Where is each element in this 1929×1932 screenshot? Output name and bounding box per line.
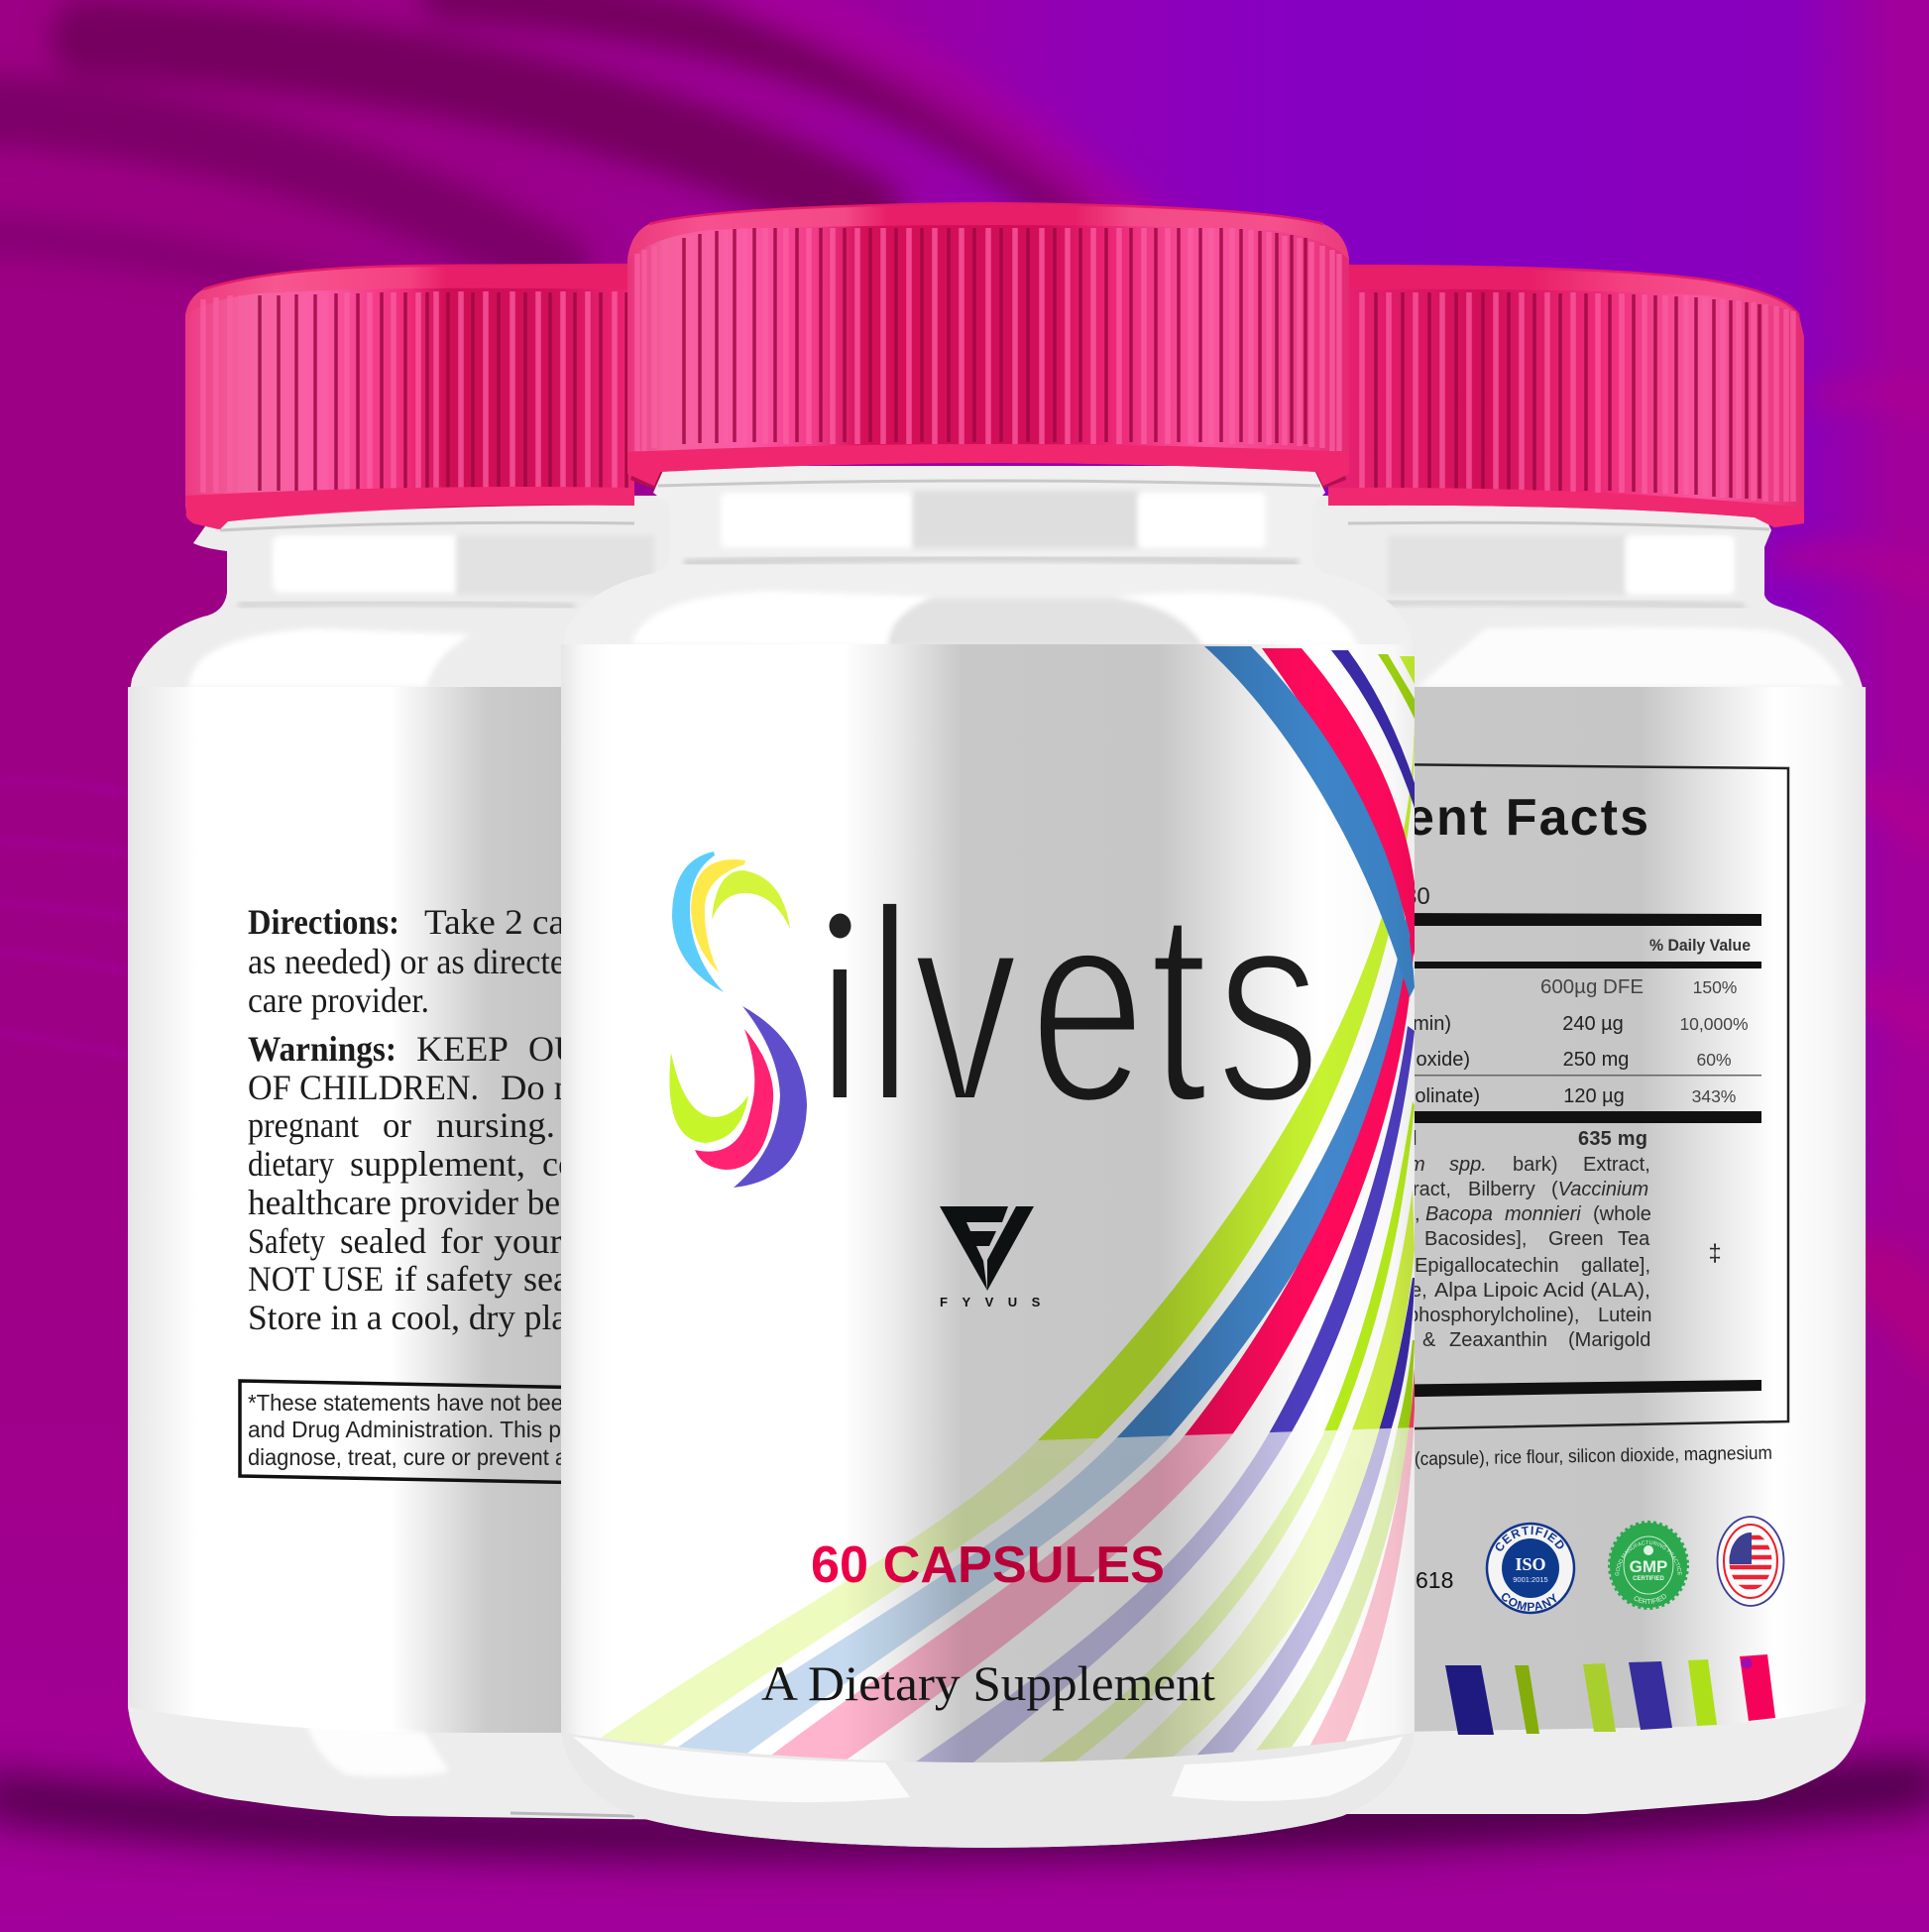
badge: ISO: COMPANY bbox=[1501, 1593, 1556, 1611]
directions text: sealed bbox=[340, 1221, 426, 1261]
directions text: OF CHILDREN. bbox=[248, 1068, 479, 1107]
proprietary blend text: Bilberry bbox=[1468, 1179, 1535, 1200]
proprietary blend text: ( bbox=[1551, 1179, 1558, 1200]
directions text: Directions: bbox=[248, 902, 399, 942]
partial number: 618 bbox=[1416, 1567, 1453, 1593]
shading overlay bbox=[555, 634, 1418, 1774]
centre bottle cap bbox=[627, 203, 1349, 486]
other ingredients: (capsule), rice flour, silicon dioxide, magnesium bbox=[1415, 1443, 1772, 1470]
proprietary blend text: Lutein bbox=[1598, 1305, 1651, 1326]
directions text: Take 2 ca bbox=[424, 902, 565, 942]
nutrient rows: 250 mg bbox=[1563, 1049, 1629, 1071]
directions text: as needed) or as directe bbox=[248, 942, 565, 981]
proprietary blend text: , bbox=[1415, 1203, 1420, 1225]
directions text: Warnings: bbox=[248, 1029, 397, 1069]
directions text: sea bbox=[523, 1259, 569, 1299]
supplement facts panel bbox=[1368, 764, 1788, 1429]
badge: GMP: GOOD MANUFACTURING PRACTICE bbox=[1615, 1540, 1682, 1576]
proprietary blend text: ‡ bbox=[1708, 1240, 1722, 1267]
proprietary blend text: m bbox=[1409, 1154, 1425, 1176]
directions text: care provider. bbox=[248, 980, 429, 1020]
proprietary blend text: & bbox=[1422, 1329, 1436, 1351]
directions text: supplement, bbox=[350, 1144, 525, 1184]
badge: ISO: ISO bbox=[1515, 1554, 1546, 1574]
supplement facts panel: 30 bbox=[1404, 883, 1430, 910]
proprietary blend text: Tea bbox=[1618, 1228, 1650, 1250]
proprietary blend text: Epigallocatechin bbox=[1415, 1255, 1559, 1277]
right bottle (facts side) bbox=[1249, 264, 1866, 1834]
proprietary blend text: Bacosides], bbox=[1424, 1228, 1527, 1250]
title: Silvets bbox=[829, 904, 1310, 1100]
proprietary blend text: spp. bbox=[1449, 1154, 1487, 1176]
right bottle body bbox=[1289, 496, 1866, 1814]
proprietary blend text: Vaccinium bbox=[1558, 1179, 1648, 1200]
60 capsules: 60 CAPSULES bbox=[811, 1536, 1165, 1594]
disclaimer box: diagnose, treat, cure or prevent a bbox=[248, 1444, 567, 1470]
proprietary blend text: Bacopa bbox=[1425, 1203, 1493, 1225]
directions text: KEEP bbox=[416, 1029, 509, 1069]
directions text: OU bbox=[528, 1029, 580, 1069]
a dietary supplement: A Dietary Supplement bbox=[761, 1655, 1215, 1711]
left bottle body bbox=[128, 496, 694, 1820]
badge: GMP: CERTIFIED bbox=[1633, 1576, 1664, 1582]
coloured ribbons bbox=[601, 646, 1415, 1762]
left bottle cap bbox=[185, 265, 634, 529]
nutrient rows: 120 µg bbox=[1563, 1085, 1625, 1107]
nutrient rows: min) bbox=[1413, 1013, 1451, 1035]
nutrient rows: 60% bbox=[1696, 1050, 1732, 1070]
supplement facts panel: % Daily Value bbox=[1649, 936, 1751, 955]
proprietary blend text: gallate], bbox=[1581, 1255, 1650, 1277]
disclaimer box: *These statements have not bee bbox=[248, 1390, 563, 1416]
directions text: NOT USE bbox=[248, 1259, 384, 1299]
directions text: nursing. bbox=[436, 1105, 555, 1145]
proprietary blend text: (Marigold bbox=[1568, 1329, 1650, 1351]
proprietary blend text: e, bbox=[1411, 1280, 1427, 1302]
right bottle cap bbox=[1328, 266, 1804, 527]
directions text bbox=[248, 902, 580, 1337]
proprietary blend text: ract, bbox=[1413, 1179, 1451, 1200]
badge: ISO: CERTIFIED bbox=[1495, 1527, 1564, 1550]
directions text: pregnant bbox=[248, 1105, 359, 1145]
badge: ISO bbox=[1485, 1523, 1576, 1614]
nutrient rows: 240 µg bbox=[1562, 1013, 1624, 1035]
badge: ISO: 9001:2015 bbox=[1513, 1575, 1548, 1584]
directions text: Do n bbox=[501, 1068, 572, 1107]
proprietary blend text: (whole bbox=[1593, 1203, 1651, 1225]
disclaimer box bbox=[240, 1381, 595, 1483]
centre bottle bbox=[555, 203, 1418, 1848]
directions text: healthcare provider be bbox=[248, 1183, 560, 1222]
directions text: or bbox=[383, 1105, 411, 1145]
colour bars bbox=[1445, 1654, 1775, 1735]
heading: ent Facts bbox=[1406, 789, 1648, 847]
proprietary blend text: 635 mg bbox=[1578, 1128, 1647, 1150]
centre label bbox=[555, 634, 1418, 1774]
logo: S swooshes bbox=[669, 852, 807, 1188]
proprietary blend text: Green bbox=[1548, 1228, 1604, 1250]
nutrient rows bbox=[1413, 976, 1749, 1107]
proprietary blend text: monnieri bbox=[1505, 1203, 1581, 1225]
nutrient rows: 150% bbox=[1693, 977, 1737, 997]
directions text: your bbox=[494, 1221, 562, 1261]
title: Silvets: ilvets bbox=[817, 851, 1321, 1160]
directions text: if safety bbox=[395, 1259, 512, 1299]
nutrient rows: 10,000% bbox=[1679, 1014, 1749, 1034]
nutrient rows: olinate) bbox=[1415, 1085, 1480, 1107]
disclaimer box: and Drug Administration. This p bbox=[248, 1417, 561, 1442]
proprietary blend text bbox=[1408, 1128, 1722, 1351]
badge: GMP: CERTIFIED bbox=[1634, 1594, 1666, 1604]
proprietary blend text: phosphorylcholine), bbox=[1408, 1305, 1579, 1326]
proprietary blend text: Zeaxanthin bbox=[1449, 1329, 1547, 1351]
proprietary blend text: l bbox=[1412, 1128, 1418, 1150]
directions text: Safety bbox=[248, 1221, 325, 1261]
left bottle (directions side) bbox=[128, 265, 694, 1820]
proprietary blend text: bark) bbox=[1513, 1154, 1558, 1176]
centre bottle body bbox=[561, 466, 1415, 1848]
proprietary blend text: Extract, bbox=[1583, 1154, 1650, 1176]
centre bottle base highlights bbox=[573, 1737, 1403, 1802]
badge: GMP bbox=[1608, 1521, 1689, 1610]
nutrient rows: oxide) bbox=[1417, 1049, 1470, 1071]
proprietary blend text: Alpa Lipoic Acid (ALA), bbox=[1434, 1280, 1650, 1302]
nutrient rows: 343% bbox=[1692, 1086, 1736, 1106]
directions text: for bbox=[440, 1221, 483, 1261]
FYVUS brand logo: FYVUS bbox=[940, 1295, 1055, 1309]
directions text: Store in a cool, dry pla bbox=[248, 1298, 567, 1337]
directions text: dietary bbox=[248, 1144, 334, 1184]
FYVUS brand logo bbox=[940, 1206, 1055, 1309]
nutrient rows: 600µg DFE bbox=[1540, 976, 1644, 998]
badge: GMP: GMP bbox=[1630, 1557, 1667, 1576]
directions text: co bbox=[542, 1144, 576, 1184]
badge: USA flag bbox=[1717, 1517, 1784, 1606]
